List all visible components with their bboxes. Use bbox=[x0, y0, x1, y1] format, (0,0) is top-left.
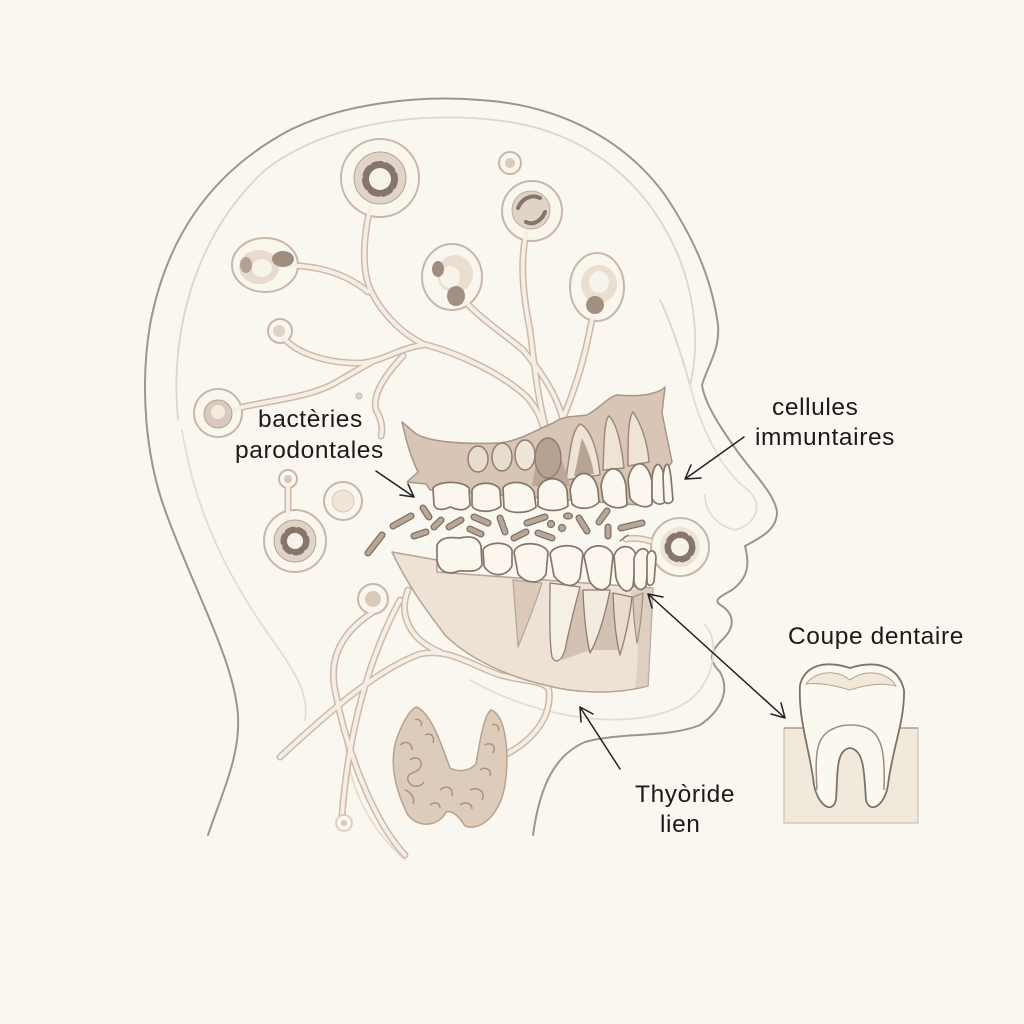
bacteria bbox=[368, 508, 642, 553]
cell: small left bbox=[273, 325, 285, 337]
label: immune: immuntaires bbox=[755, 424, 895, 451]
nerve tubes: outer lines bbox=[220, 180, 650, 855]
cell nuclei bbox=[204, 152, 700, 607]
cell: upper right bbox=[512, 191, 550, 229]
cell: left bbox=[239, 250, 294, 284]
label: link: lien bbox=[660, 811, 701, 838]
arrow: tooth section bbox=[648, 594, 785, 718]
cell membranes bbox=[194, 139, 709, 614]
arrow: thyroid bbox=[580, 707, 620, 769]
nerve tubes: inner fill bbox=[220, 180, 650, 855]
tooth cross-section bbox=[784, 664, 918, 823]
cell: medium bbox=[332, 490, 354, 512]
cell: small lower bbox=[365, 591, 381, 607]
arrow: immune cells bbox=[685, 437, 744, 479]
thyroid bbox=[393, 707, 507, 827]
upper teeth bbox=[433, 464, 673, 512]
label: cells: cellules bbox=[772, 394, 859, 421]
arrow: bacteria bbox=[376, 471, 414, 497]
lower teeth bbox=[437, 537, 656, 591]
upper jaw bbox=[402, 387, 672, 505]
cell: middle bbox=[432, 255, 473, 306]
small cell low bbox=[336, 815, 352, 831]
label: tooth section: Coupe dentaire bbox=[788, 623, 964, 650]
cell: tiny bbox=[284, 475, 292, 483]
label: bacteria: bactèries bbox=[258, 406, 363, 433]
head outline bbox=[145, 99, 777, 860]
cell: small top bbox=[505, 158, 515, 168]
cell: right bbox=[581, 265, 617, 314]
cell: top bbox=[354, 152, 406, 204]
label: thyroid: Thyòride bbox=[635, 781, 735, 808]
cell: far left bbox=[204, 400, 232, 428]
cell: by lips bbox=[660, 527, 700, 567]
follicles bbox=[468, 438, 561, 478]
cell: lower left bbox=[274, 520, 316, 562]
label: periodontal: parodontales bbox=[235, 437, 384, 464]
arrows bbox=[376, 437, 785, 769]
lower jaw bbox=[392, 552, 653, 692]
small dot bbox=[356, 393, 362, 399]
